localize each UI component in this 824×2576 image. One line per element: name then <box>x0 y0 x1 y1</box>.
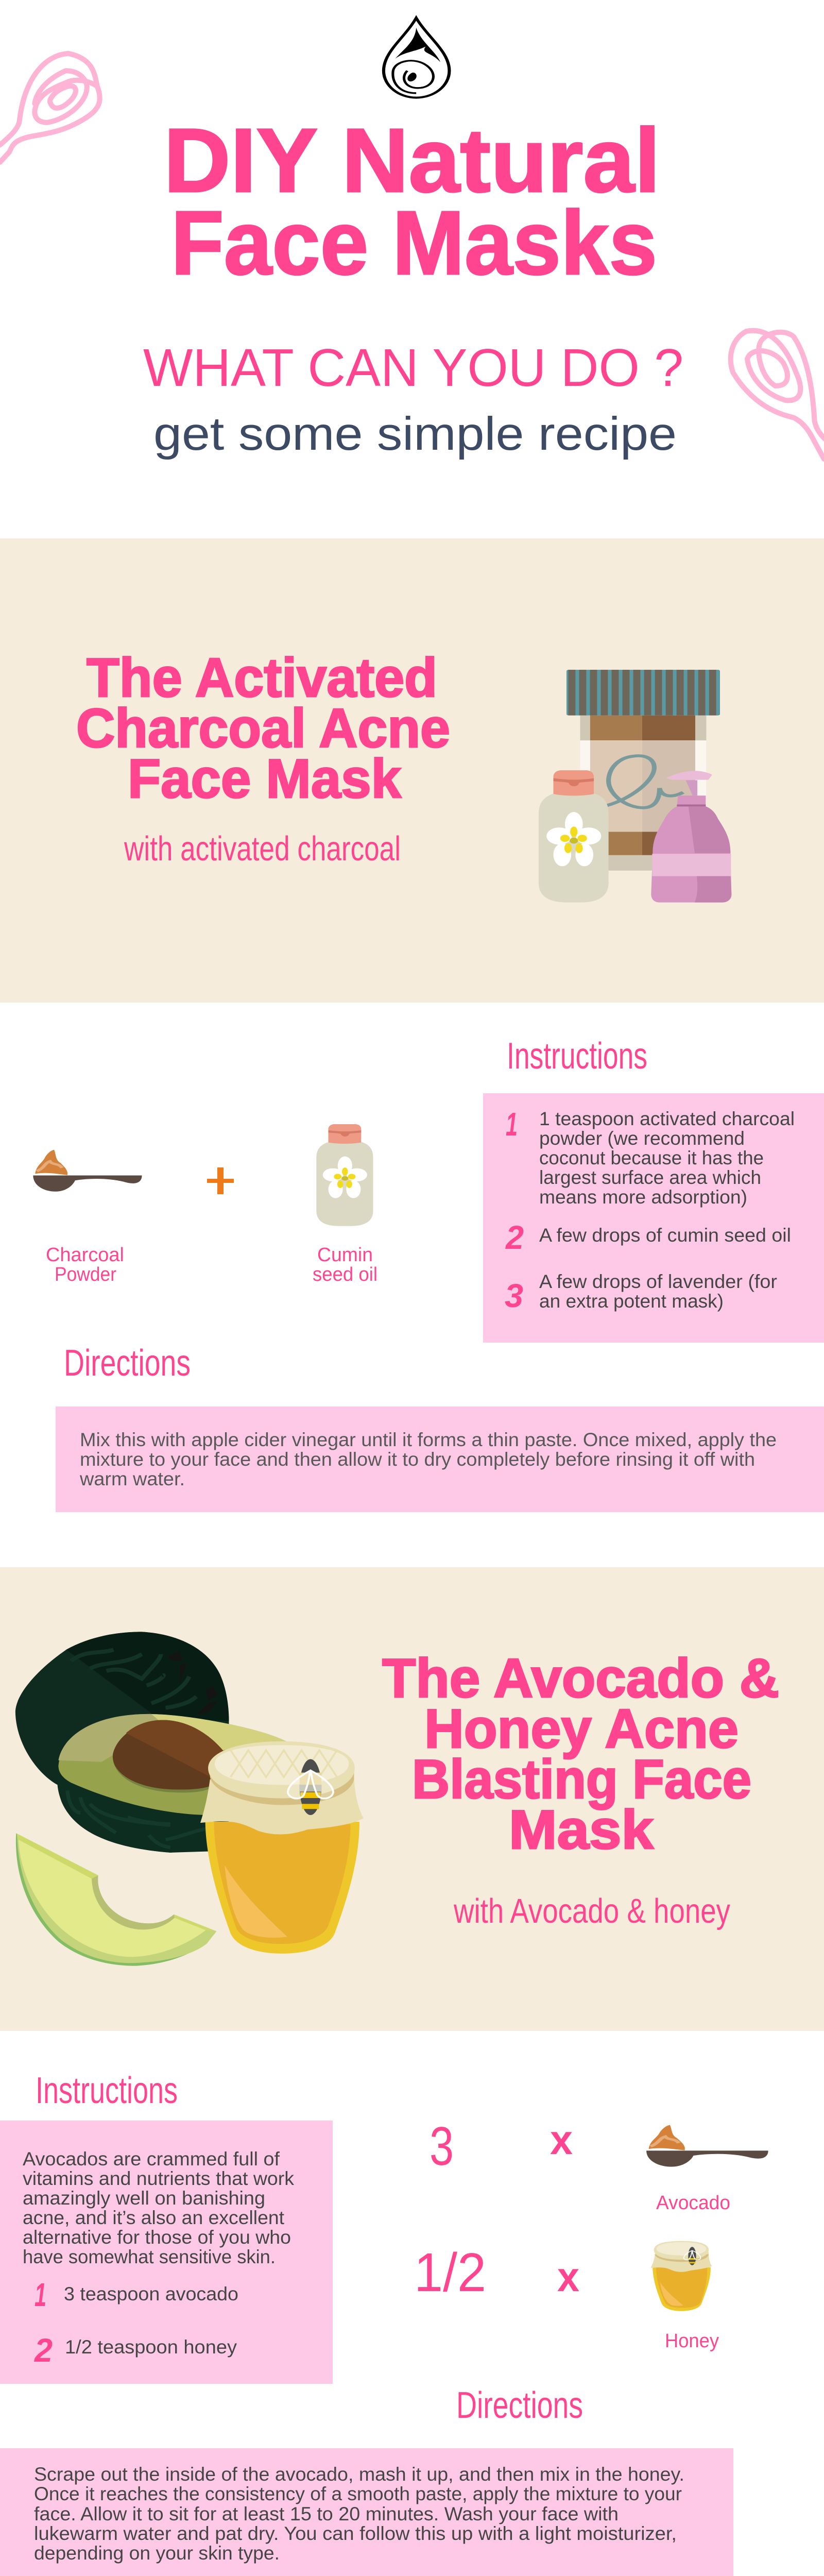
illustration: honey jar with bee <box>200 1741 364 1954</box>
step 3: an extra potent mask) <box>539 1291 724 1312</box>
heading: avocado honey mask: The Avocado & <box>382 1647 779 1709</box>
icon: whisk right <box>731 331 824 459</box>
heading: directions: Directions <box>456 2385 583 2426</box>
panel: instruction list: have somewhat sensitive skin. <box>23 2246 276 2267</box>
step 3: A few drops of lavender (for <box>539 1271 777 1292</box>
quantity: half honey <box>414 2242 579 2303</box>
panel: instruction list: amazingly well on banishing <box>23 2188 265 2209</box>
heading: charcoal mask: Charcoal Acne <box>76 697 450 759</box>
icon: cumin oil bottle <box>316 1124 373 1226</box>
panel: directions text: face. Allow it to sit for at least 15 to 20 minutes. Wash your face with <box>34 2503 619 2524</box>
label: honey: Honey <box>665 2330 719 2352</box>
step 2: A few drops of cumin seed oil <box>539 1225 791 1246</box>
label: cumin seed oil <box>313 1244 377 1285</box>
step 2: 2 <box>505 1219 524 1256</box>
panel: directions text <box>56 1406 824 1512</box>
step 3: 3 <box>505 1277 523 1314</box>
step 1: largest surface area which <box>539 1167 761 1188</box>
heading: avocado honey mask: Honey Acne <box>424 1698 739 1759</box>
quantity: 3 avocado: 3 <box>430 2116 454 2177</box>
panel: directions text: depending on your skin type. <box>34 2543 280 2564</box>
panel: charcoal mask banner <box>0 538 824 1003</box>
panel: instruction list: Avocados are crammed full of <box>23 2148 280 2170</box>
label: charcoal powder <box>46 1244 124 1285</box>
step 2: 1/2 teaspoon honey <box>65 2336 237 2358</box>
heading: charcoal mask: The Activated <box>87 647 437 708</box>
subtitle: WHAT CAN YOU DO ? <box>143 338 683 397</box>
step 1: 3 teaspoon avocado <box>64 2283 238 2304</box>
step 2 <box>505 1219 791 1256</box>
panel: directions text: warm water. <box>79 1468 185 1489</box>
panel: header <box>0 0 824 538</box>
step 1 <box>35 2276 238 2313</box>
illustration: avocado and slice <box>15 1632 286 1966</box>
heading: charcoal mask <box>76 647 450 809</box>
title: Face Masks <box>171 193 657 294</box>
subheading: with avocado and honey: with Avocado & honey <box>453 1892 730 1930</box>
heading: instructions: Instructions <box>36 2070 178 2111</box>
panel: instruction list: vitamins and nutrients that work <box>23 2168 295 2189</box>
panel: avocado honey banner <box>0 1567 824 2031</box>
quantity: 3 avocado: x <box>550 2117 573 2163</box>
panel: directions text: Mix this with apple cider vinegar until it forms a thin paste. Once mixed, apply the <box>80 1429 777 1450</box>
step 1: 1 <box>35 2276 46 2313</box>
step 2 <box>34 2332 237 2369</box>
heading: avocado honey mask: Blasting Face <box>412 1748 751 1810</box>
step 1: 1 teaspoon activated charcoal <box>539 1108 795 1129</box>
label: cumin seed oil: seed oil <box>313 1264 377 1285</box>
icon: charcoal powder spoon <box>33 1150 142 1192</box>
quantity: half honey: x <box>557 2254 579 2300</box>
step 1 <box>506 1106 795 1208</box>
heading: instructions: Instructions <box>507 1036 647 1077</box>
quantity: 3 avocado <box>430 2116 573 2177</box>
panel: avocado recipe <box>0 2070 768 2576</box>
icon: plus <box>207 1167 234 1194</box>
step 1: powder (we recommend <box>539 1128 745 1149</box>
panel: directions text: mixture to your face and then allow it to dry completely before rinsing it off with <box>80 1449 755 1470</box>
label: cumin seed oil: Cumin <box>317 1244 373 1266</box>
panel: directions text: Once it reaches the consistency of a smooth paste, apply the mixture to your <box>34 2483 682 2504</box>
heading: avocado honey mask: Mask <box>509 1799 654 1860</box>
step 1: 1 <box>506 1106 518 1143</box>
subheading: with activated charcoal: with activated charcoal <box>124 829 401 868</box>
heading: directions: Directions <box>64 1343 191 1384</box>
title <box>164 110 660 294</box>
panel: directions text: Scrape out the inside of the avocado, mash it up, and then mix in the honey. <box>34 2464 684 2485</box>
panel: instruction list: alternative for those of you who <box>23 2227 291 2248</box>
heading: avocado honey mask <box>382 1647 779 1860</box>
label: avocado: Avocado <box>656 2192 730 2214</box>
label: charcoal powder: Charcoal <box>46 1244 124 1266</box>
panel: directions text <box>0 2448 733 2576</box>
step 2: 2 <box>34 2332 53 2369</box>
panel: instruction list <box>483 1093 824 1343</box>
icon: honey jar small <box>650 2241 712 2311</box>
quantity: half honey: 1/2 <box>414 2242 486 2303</box>
tagline: get some simple recipe <box>153 408 677 460</box>
heading: charcoal mask: Face Mask <box>128 748 401 809</box>
panel: charcoal recipe <box>33 1036 824 1512</box>
step 1: coconut because it has the <box>539 1147 764 1168</box>
title: DIY Natural <box>164 110 660 211</box>
step 1: means more adsorption) <box>539 1187 747 1208</box>
illustration: cosmetic jar and bottles <box>539 670 731 903</box>
panel: instruction list: acne, and it’s also an excellent <box>23 2207 285 2228</box>
icon: avocado spoon <box>646 2125 768 2167</box>
icon: logo drop <box>384 18 449 98</box>
panel: instruction list <box>0 2121 333 2384</box>
label: charcoal powder: Powder <box>55 1264 116 1285</box>
icon: whisk left <box>0 54 100 162</box>
step 3 <box>505 1271 777 1314</box>
panel: directions text: lukewarm water and pat dry. You can follow this up with a light moisturizer, <box>34 2523 677 2544</box>
